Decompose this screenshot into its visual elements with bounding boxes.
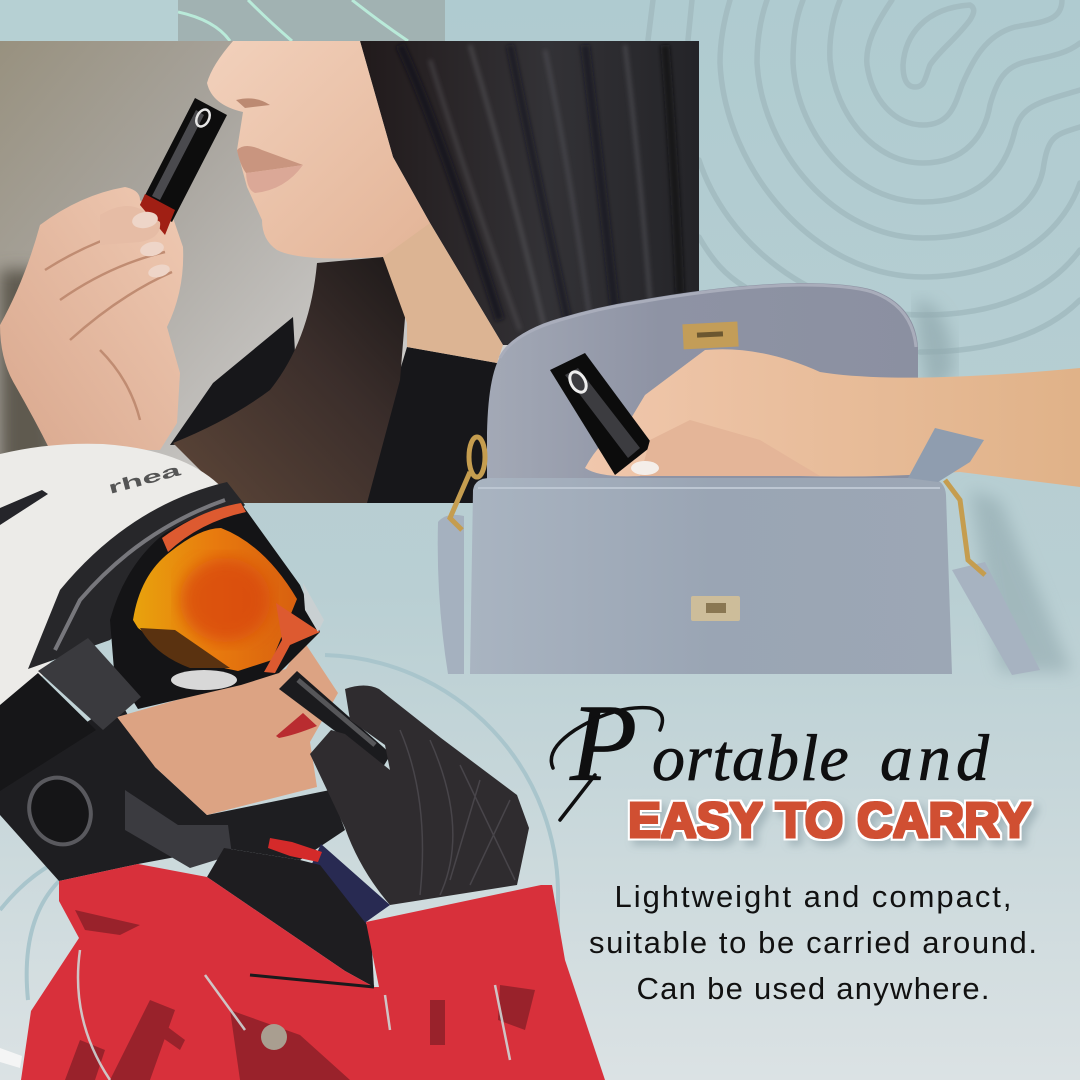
scarf	[310, 844, 390, 970]
bag flap	[487, 283, 918, 480]
hair	[360, 41, 699, 345]
red clip	[268, 838, 322, 862]
left strap	[438, 515, 464, 674]
red lips	[276, 713, 317, 738]
gold clasp front	[691, 596, 740, 621]
zip tab	[908, 428, 984, 482]
lips	[237, 146, 303, 173]
face	[207, 41, 430, 258]
description text: Lightweight and compact,	[614, 879, 1012, 914]
goggle logo	[171, 670, 237, 690]
goggle lens	[133, 528, 297, 671]
heading script line: P	[569, 682, 637, 804]
script flourish on capital P	[551, 708, 662, 820]
lens reflection	[140, 628, 230, 668]
hair strands	[400, 45, 680, 330]
helmet vent	[0, 490, 48, 525]
ear vent	[18, 768, 102, 854]
helmet	[0, 444, 227, 705]
helmet brim sheen	[55, 500, 225, 650]
fingers over inhaler	[640, 420, 820, 476]
lower hair	[173, 257, 407, 503]
chin strap buckle	[125, 790, 232, 868]
decorative circle arcs	[0, 655, 558, 1000]
goggle orange trim	[162, 503, 320, 673]
index finger over inhaler	[100, 220, 160, 243]
glove	[310, 686, 529, 905]
top colour strip	[178, 0, 445, 41]
photo backdrop	[0, 41, 508, 470]
goggle frame	[110, 503, 320, 709]
dark collar	[207, 848, 374, 987]
neck	[383, 223, 503, 363]
heading script line: and	[880, 722, 994, 795]
photo: woman smelling the inhaler	[0, 41, 699, 503]
right strap	[952, 562, 1040, 675]
jacket shading	[65, 910, 535, 1080]
collar edge	[250, 975, 374, 987]
goggle strap	[0, 673, 96, 791]
contour line pattern	[648, 0, 1080, 352]
flap top edge	[500, 285, 916, 358]
bag body	[470, 478, 952, 674]
fingernails	[132, 212, 170, 278]
gold chain left	[450, 437, 485, 530]
arm and hand	[585, 349, 1080, 487]
jacket button	[261, 1024, 287, 1050]
inhaler in bag	[550, 353, 653, 475]
description text	[589, 879, 1037, 1006]
gold chain right	[945, 480, 985, 575]
heading bold line: EASY TO CARRY	[628, 794, 1031, 848]
bag strap shadow	[970, 490, 1072, 672]
red jacket	[21, 864, 605, 1080]
inhaler at nose	[279, 671, 391, 767]
inhaler sheen	[298, 680, 375, 745]
lower lip	[246, 165, 303, 193]
handbag	[438, 283, 1080, 675]
gold clasp top	[682, 322, 739, 349]
fingernail	[631, 461, 659, 475]
white corner bar	[0, 1048, 22, 1068]
description text: suitable to be carried around.	[589, 925, 1037, 960]
lens red glow	[180, 558, 270, 642]
description text: Can be used anywhere.	[636, 971, 990, 1006]
bag shadow	[915, 300, 955, 400]
finger lines	[45, 225, 172, 420]
sweater	[170, 317, 497, 503]
face	[117, 640, 338, 815]
goggle strap holder	[38, 638, 141, 730]
jacket seams	[78, 950, 510, 1080]
helmet brim	[28, 482, 245, 669]
bag stitching	[478, 487, 940, 489]
backdrop dark lower left	[0, 260, 48, 454]
heading script line: ortable	[652, 722, 850, 795]
skier	[0, 444, 605, 1080]
inhaler tube	[140, 98, 227, 235]
clear outer lens	[303, 583, 324, 632]
lower helmet shell	[0, 700, 345, 881]
glove quilting	[400, 730, 515, 895]
hand	[0, 187, 183, 450]
helmet brand: rhea	[106, 460, 184, 498]
nostril shadow	[236, 98, 270, 108]
